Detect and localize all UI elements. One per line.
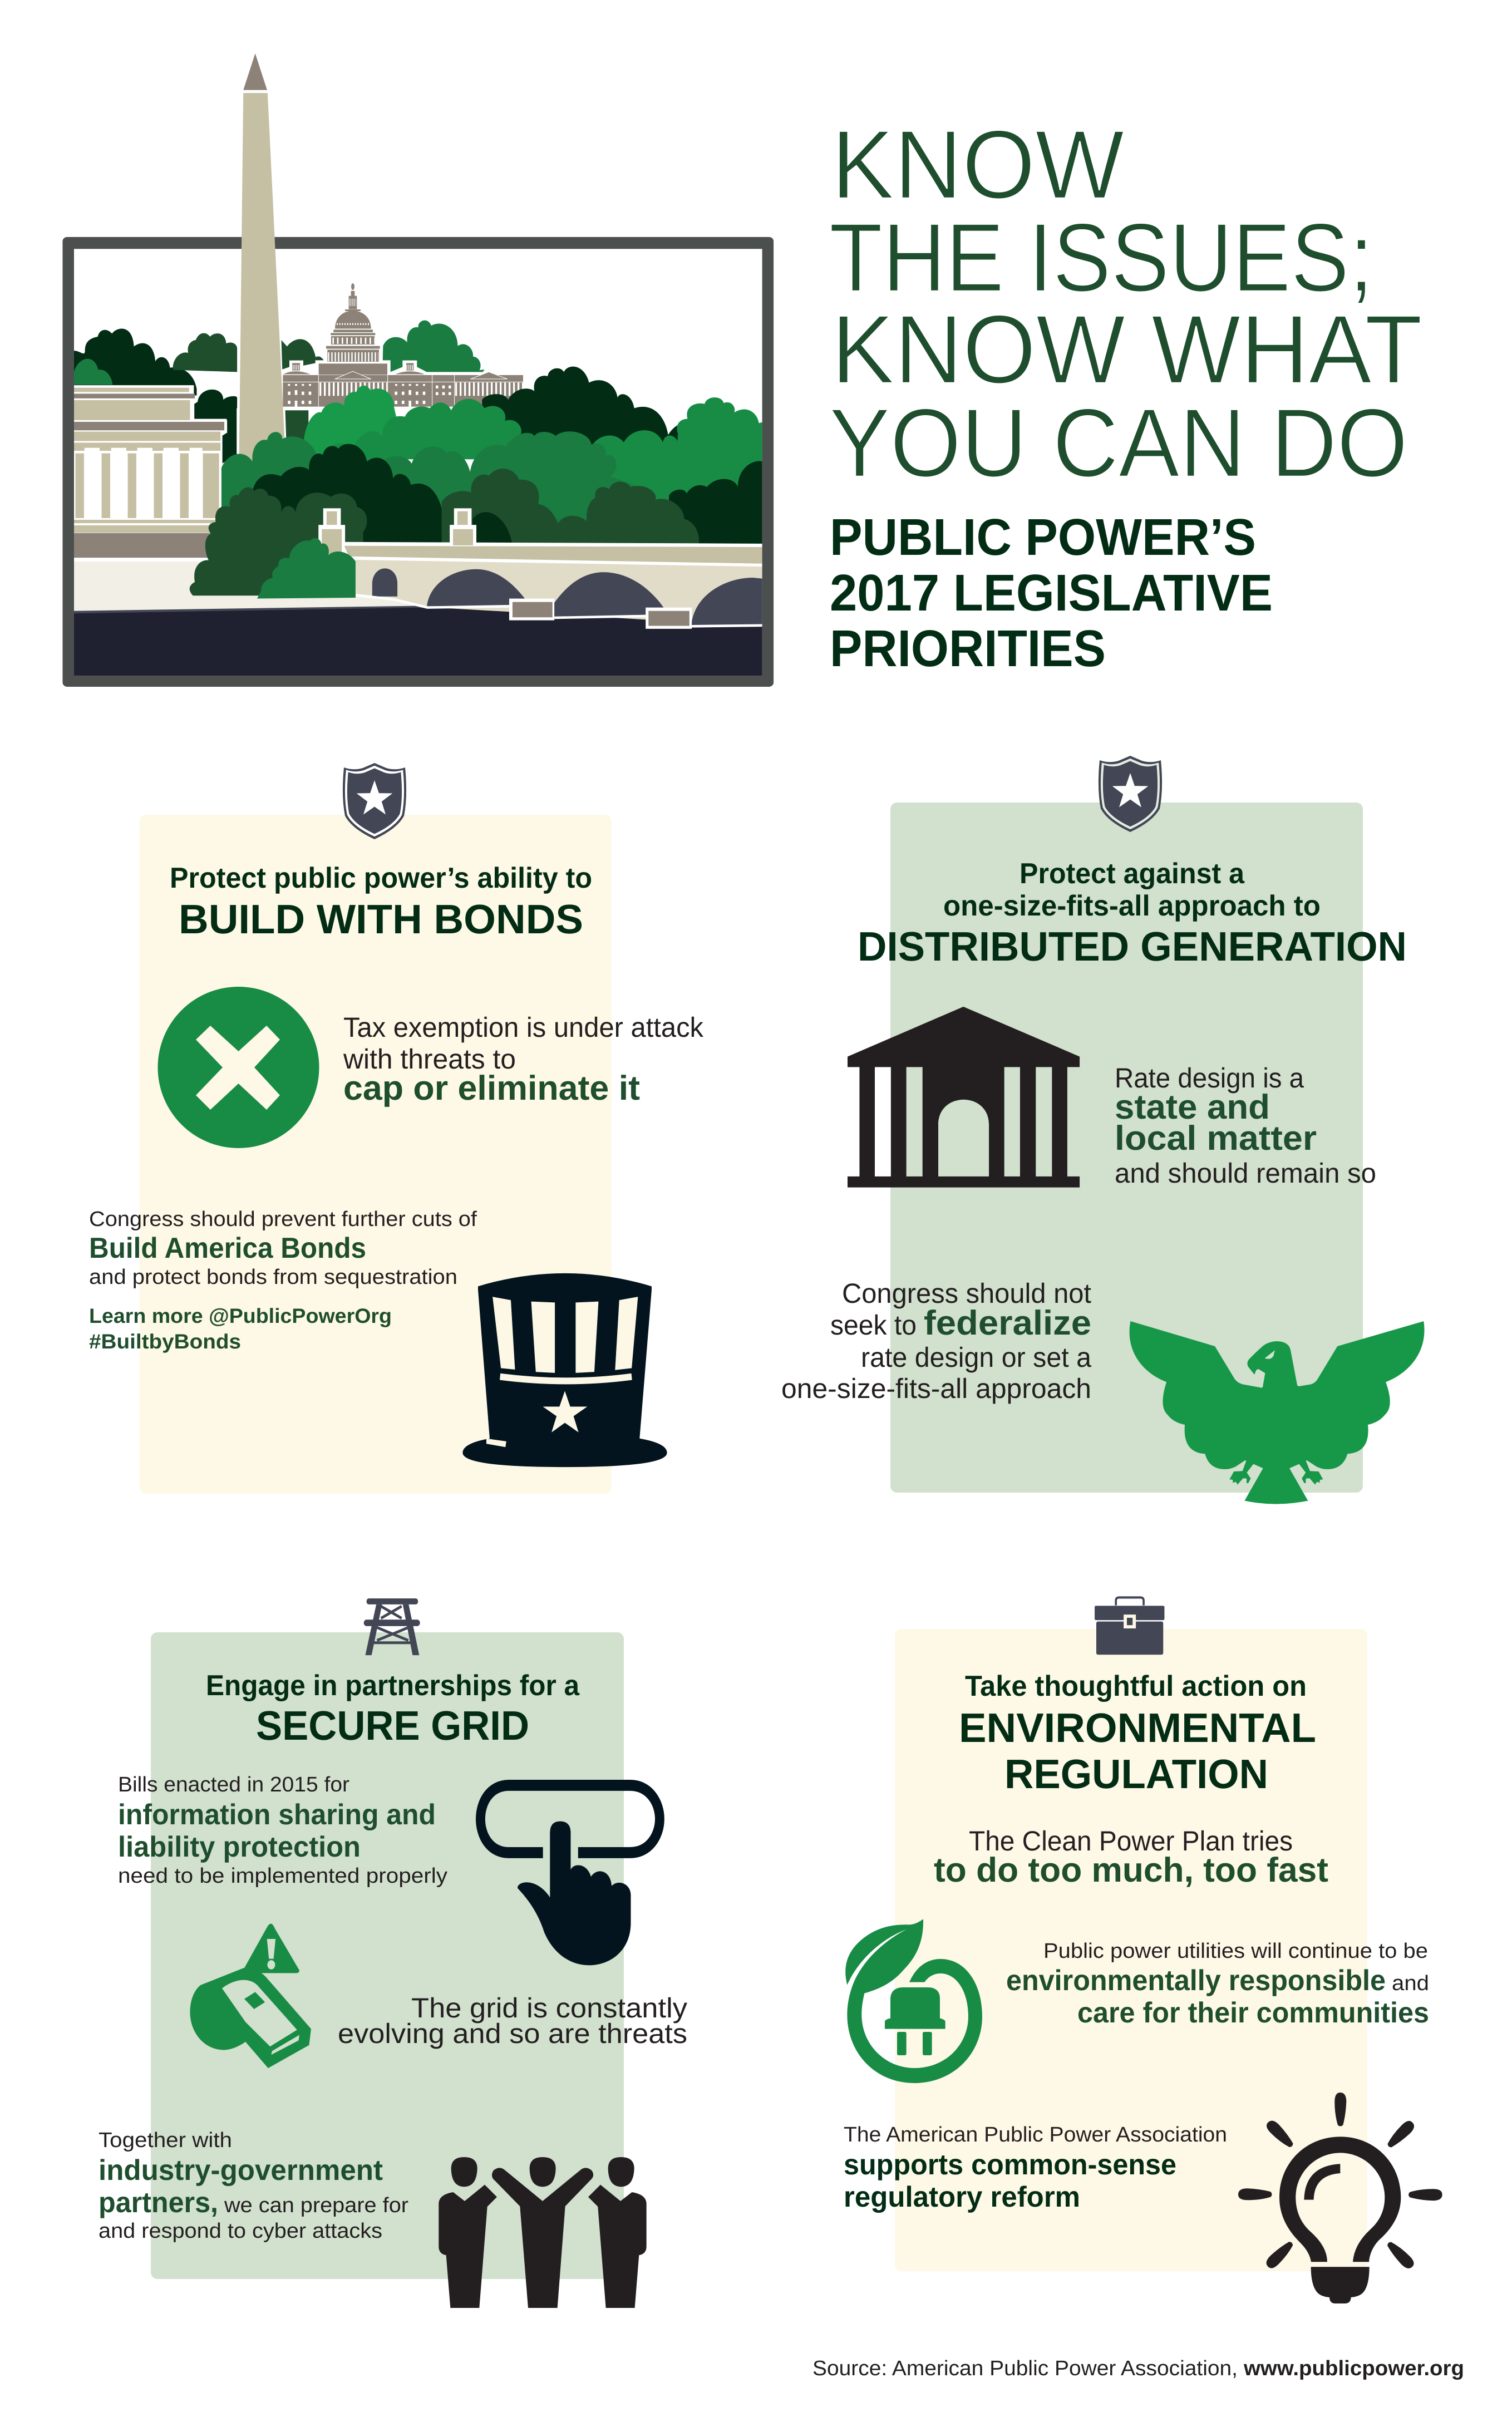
text: tax exemption: with threats to xyxy=(343,1043,516,1075)
text: build america bonds: Learn more @PublicPowerOrg xyxy=(89,1305,392,1327)
icon: whistle with warning triangle xyxy=(190,1924,311,2068)
text: build america bonds: Congress should prevent further cuts of xyxy=(89,1208,477,1231)
panel: environmental regulation xyxy=(844,1597,1442,2303)
text: regulatory reform: The American Public Power Association xyxy=(844,2123,1227,2147)
text: rate design: Rate design is a xyxy=(1115,1062,1304,1094)
mid trees xyxy=(194,367,762,544)
icon: shield xyxy=(343,763,406,839)
heading: environmental regulation xyxy=(959,1670,1316,1797)
panel: build with bonds xyxy=(89,763,704,1494)
subtitle: PRIORITIES xyxy=(830,619,1106,677)
text: partners: partners, xyxy=(98,2187,218,2219)
text: information sharing xyxy=(118,1773,447,1888)
text: tax exemption xyxy=(343,1012,704,1107)
icon: hand pressing button xyxy=(480,1785,659,1965)
text: grid evolving: evolving and so are threats xyxy=(338,2018,687,2049)
text: tax exemption: Tax exemption is under attack xyxy=(343,1012,704,1043)
text: rate design xyxy=(1115,1062,1376,1189)
text: information sharing: Bills enacted in 2015 for xyxy=(118,1773,349,1796)
text: regulatory reform: regulatory reform xyxy=(844,2181,1080,2213)
icon: columned building xyxy=(848,1007,1080,1188)
heading: environmental regulation: REGULATION xyxy=(1004,1751,1268,1797)
title: YOU CAN DO xyxy=(829,389,1408,498)
subtitle xyxy=(830,508,1273,677)
text: build america bonds: and protect bonds from sequestration xyxy=(89,1266,457,1289)
front trees xyxy=(190,432,762,629)
source line: Source: American Public Power Association, xyxy=(812,2357,1238,2380)
text: build america bonds: Build America Bonds xyxy=(89,1232,366,1264)
text: regulatory reform xyxy=(844,2123,1227,2213)
heading: distributed generation: one-size-fits-all approach to xyxy=(943,890,1321,922)
heading: distributed generation: DISTRIBUTED GENERATION xyxy=(858,923,1407,969)
heading: distributed generation xyxy=(858,858,1407,969)
icon: uncle sam hat xyxy=(462,1273,667,1467)
text: federalize: seek to xyxy=(830,1310,917,1341)
text: environmentally responsible xyxy=(1006,1939,1429,2029)
washington monument xyxy=(237,53,287,464)
text: partners: we can prepare for xyxy=(224,2194,408,2217)
title xyxy=(829,111,1422,498)
icon: three people xyxy=(439,2157,647,2308)
lincoln memorial xyxy=(74,385,427,612)
heading: environmental regulation: ENVIRONMENTAL xyxy=(959,1705,1316,1751)
heading: secure grid: SECURE GRID xyxy=(256,1702,529,1749)
subtitle: 2017 LEGISLATIVE xyxy=(830,564,1273,622)
text: environmentally responsible: care for their communities xyxy=(1077,1997,1429,2029)
title: KNOW xyxy=(831,111,1124,219)
text: partners: industry-government xyxy=(98,2154,383,2187)
heading: environmental regulation: Take thoughtful action on xyxy=(965,1670,1307,1702)
text: information sharing: need to be implemented properly xyxy=(118,1864,447,1888)
text: federalize: federalize xyxy=(924,1304,1091,1342)
picture frame xyxy=(62,237,774,687)
icon: leaf and plug xyxy=(845,1919,982,2083)
heading: build with bonds: Protect public power’s ability to xyxy=(170,862,592,894)
panel: distributed generation xyxy=(781,756,1425,1504)
panel: secure grid xyxy=(98,1598,687,2308)
text: federalize: rate design or set a xyxy=(861,1342,1091,1373)
heading: distributed generation: Protect against a xyxy=(1020,858,1245,890)
text: regulatory reform: supports common-sense xyxy=(844,2149,1176,2181)
heading: secure grid xyxy=(206,1670,580,1749)
text: partners: and respond to cyber attacks xyxy=(98,2219,382,2243)
bridge deck xyxy=(318,508,762,629)
illustration: Washington DC skyline in frame xyxy=(62,53,774,687)
text: clean power plan: to do too much, too fast xyxy=(934,1851,1328,1889)
heading: build with bonds: BUILD WITH BONDS xyxy=(179,896,583,942)
text: clean power plan xyxy=(934,1825,1328,1889)
icon: transmission tower xyxy=(364,1598,420,1655)
text: clean power plan: The Clean Power Plan tries xyxy=(969,1825,1293,1857)
source line: www.publicpower.org xyxy=(1243,2357,1464,2380)
text: federalize xyxy=(781,1278,1091,1404)
text: environmentally responsible: environmentally responsible xyxy=(1006,1965,1386,1997)
text: rate design: local matter xyxy=(1115,1119,1317,1158)
back trees xyxy=(74,328,324,396)
title: THE ISSUES; xyxy=(829,204,1373,312)
icon: light bulb xyxy=(1238,2093,1442,2303)
capitol building xyxy=(282,283,524,410)
text: grid evolving xyxy=(338,1992,687,2049)
text: environmentally responsible: Public power utilities will continue to be xyxy=(1043,1939,1428,1963)
icon: X in circle xyxy=(158,987,319,1148)
text: federalize: Congress should not xyxy=(842,1278,1091,1309)
text: build america bonds xyxy=(89,1208,477,1353)
text: rate design: and should remain so xyxy=(1115,1158,1376,1189)
text: tax exemption: cap or eliminate it xyxy=(343,1069,640,1107)
text: grid evolving: The grid is constantly xyxy=(411,1992,687,2024)
text: environmentally responsible: and xyxy=(1392,1972,1429,1995)
heading: secure grid: Engage in partnerships for a xyxy=(206,1670,580,1702)
icon: shield xyxy=(1099,756,1162,832)
text: federalize: one-size-fits-all approach xyxy=(781,1373,1091,1404)
icon: eagle xyxy=(1130,1321,1425,1504)
text: information sharing: information sharing and xyxy=(118,1799,436,1831)
text: information sharing: liability protection xyxy=(118,1831,361,1863)
subtitle: PUBLIC POWER’S xyxy=(830,508,1256,566)
text: partners xyxy=(98,2129,408,2243)
icon: toolbox xyxy=(1095,1597,1164,1655)
heading: build with bonds xyxy=(170,862,592,942)
text: rate design: state and xyxy=(1115,1088,1270,1126)
text: build america bonds: #BuiltbyBonds xyxy=(89,1330,241,1353)
text: partners: Together with xyxy=(98,2129,232,2152)
river and bridge xyxy=(74,606,762,676)
title: KNOW WHAT xyxy=(831,296,1422,404)
source line xyxy=(812,2357,1464,2380)
